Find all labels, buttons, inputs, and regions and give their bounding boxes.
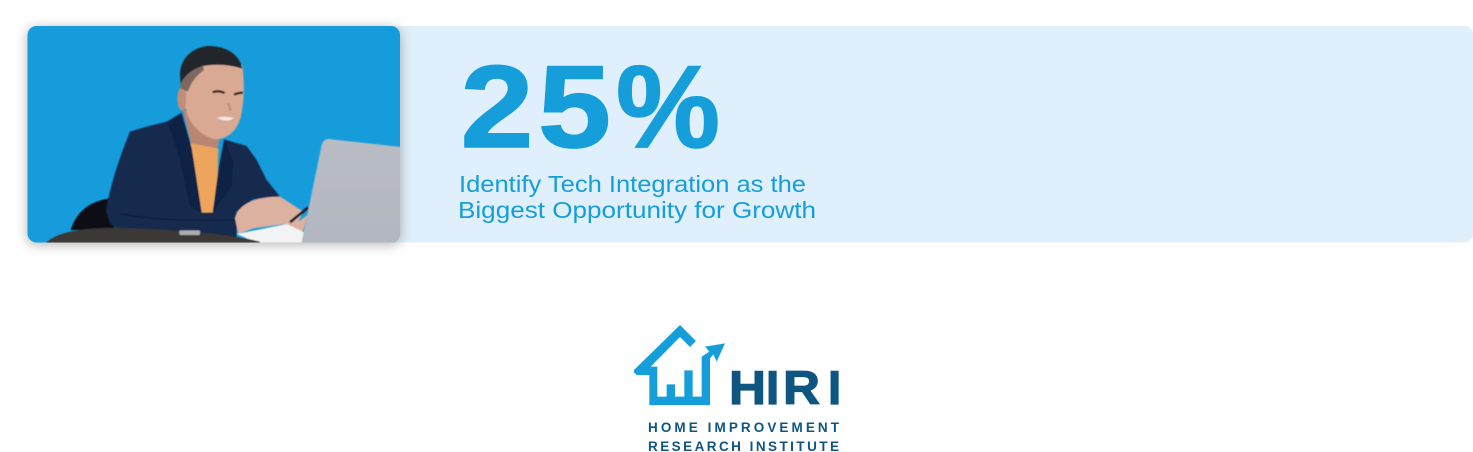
- tagline: [648, 420, 840, 452]
- neck: [182, 108, 220, 151]
- side fade of hair: [181, 62, 204, 92]
- wordmark: H: [729, 362, 766, 415]
- stat: 25%: 5: [538, 41, 611, 172]
- panel: photo of man at laptop: [28, 26, 402, 245]
- wordmark: I: [828, 362, 841, 415]
- hand: [235, 197, 307, 235]
- notepaper: [237, 224, 307, 244]
- wordmark: [729, 362, 841, 415]
- face: [185, 57, 244, 139]
- icon: house with rising arrow: [634, 325, 725, 405]
- stat: 25%: 2: [460, 41, 534, 172]
- brows, eyes and smile: [213, 91, 243, 95]
- orange shirt: [191, 143, 218, 213]
- stat description: Identify Tech Integration as the: [459, 171, 806, 197]
- table: [45, 228, 260, 245]
- stat: 25%: [460, 41, 720, 172]
- chair: [71, 198, 115, 230]
- stat description: Biggest Opportunity for Growth: [458, 197, 816, 223]
- hair: [180, 46, 242, 83]
- logo: HIRI: [634, 325, 841, 452]
- stat description: [458, 171, 816, 223]
- laptop: [301, 139, 402, 245]
- wordmark: R: [783, 362, 820, 415]
- navy jacket: [106, 113, 280, 237]
- ear: [177, 87, 188, 111]
- tagline: HOME IMPROVEMENT: [648, 420, 840, 435]
- stat: 25%: %: [616, 41, 720, 172]
- panel: light blue stat band: [380, 26, 1473, 242]
- wordmark: I: [766, 362, 779, 415]
